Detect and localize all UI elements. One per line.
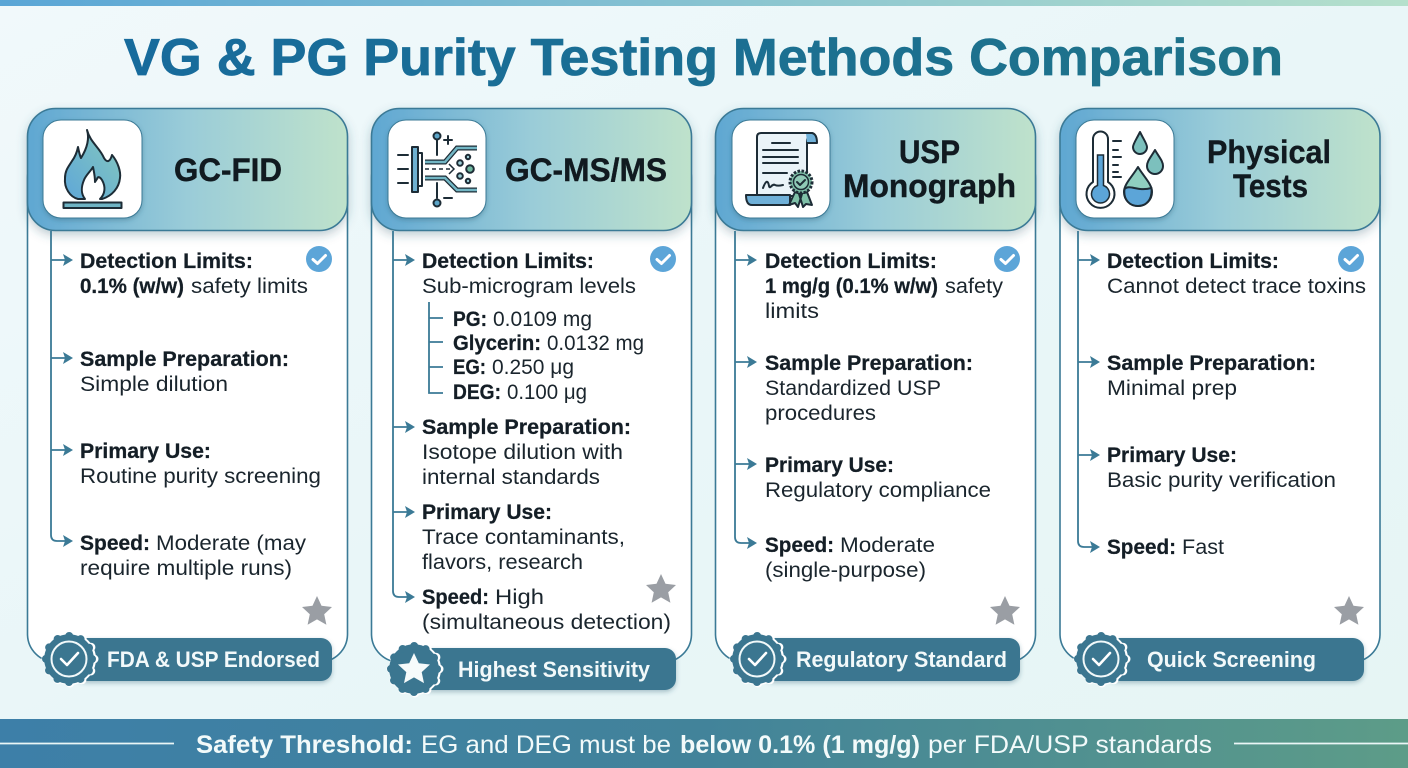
sub-list: detection values: 0.0109 mg xyxy=(493,308,592,331)
sample preparation xyxy=(80,348,289,396)
badge: Quick Screening: Quick Screening xyxy=(1147,647,1316,672)
primary use: Basic purity verification xyxy=(1107,469,1336,492)
primary use: Primary Use: xyxy=(80,440,211,463)
primary use xyxy=(80,440,321,488)
detection limits: Detection Limits: xyxy=(422,250,594,273)
badge: Quick Screening xyxy=(1076,633,1364,685)
card header: USP xyxy=(899,134,960,170)
detection limits xyxy=(765,250,1004,323)
detection limits: limits xyxy=(765,300,819,323)
timeline connector xyxy=(393,231,415,603)
primary use xyxy=(1107,444,1336,492)
sample preparation xyxy=(1107,352,1316,400)
sample preparation xyxy=(765,352,973,425)
speed: Moderate xyxy=(840,534,935,557)
icon: star xyxy=(302,596,332,625)
footer banner: safety threshold: per FDA/USP standards xyxy=(928,731,1212,759)
detection limits: 0.1% (w/w) xyxy=(80,275,184,298)
icon: flame xyxy=(43,120,142,218)
sample preparation: Standardized USP xyxy=(765,377,941,400)
footer banner: safety threshold: EG and DEG must be xyxy=(421,731,671,759)
icon: thermometer and drops xyxy=(1076,120,1174,218)
primary use: Primary Use: xyxy=(765,454,894,477)
speed: (simultaneous detection) xyxy=(422,611,671,634)
sample preparation xyxy=(422,416,631,489)
sub-list: detection values: 0.0132 mg xyxy=(547,332,644,355)
sample preparation: Sample Preparation: xyxy=(1107,352,1316,375)
icon: mass spectrometer xyxy=(388,120,486,218)
sample preparation: Minimal prep xyxy=(1107,377,1237,400)
detection limits: 1 mg/g (0.1% w/w) xyxy=(765,275,938,298)
speed: Speed: xyxy=(765,534,834,557)
card header: Tests xyxy=(1233,168,1308,204)
detection limits: Detection Limits: xyxy=(1107,250,1279,273)
card header: Monograph xyxy=(843,168,1016,204)
icon: certified document xyxy=(732,120,830,218)
icon: check xyxy=(1338,246,1364,272)
timeline connector xyxy=(735,231,757,549)
sample preparation: Simple dilution xyxy=(80,373,228,396)
card header: GC-MS/MS xyxy=(505,152,667,188)
badge: Highest Sensitivity xyxy=(389,643,676,695)
footer banner: safety threshold: Safety Threshold: xyxy=(196,731,413,759)
primary use: Primary Use: xyxy=(1107,444,1237,467)
speed xyxy=(765,534,935,582)
icon: check xyxy=(650,246,676,272)
badge: Highest Sensitivity: Highest Sensitivity xyxy=(458,657,651,682)
primary use xyxy=(765,454,991,502)
badge: FDA & USP Endorsed: FDA & USP Endorsed xyxy=(107,647,320,672)
speed: Fast xyxy=(1182,536,1224,559)
icon: check xyxy=(994,246,1020,272)
sample preparation: procedures xyxy=(765,402,876,425)
card header: GC-FID xyxy=(174,152,282,188)
timeline connector xyxy=(1078,231,1100,553)
top accent bar xyxy=(0,0,1408,6)
icon: star xyxy=(990,596,1020,625)
detection limits xyxy=(80,250,308,298)
card header xyxy=(1060,108,1380,230)
detection limits: Detection Limits: xyxy=(80,250,253,273)
sub-list: detection values: 0.250 μg xyxy=(492,356,574,379)
card body xyxy=(372,150,692,662)
icon: star xyxy=(1334,596,1364,625)
detection limits: Detection Limits: xyxy=(765,250,937,273)
footer banner: safety threshold xyxy=(0,719,1408,768)
primary use: Primary Use: xyxy=(422,501,552,524)
detection limits xyxy=(1107,250,1366,298)
icon: star xyxy=(646,574,676,603)
speed xyxy=(1107,536,1224,559)
sample preparation: Sample Preparation: xyxy=(422,416,631,439)
sample preparation: Sample Preparation: xyxy=(765,352,973,375)
speed xyxy=(80,532,307,580)
card header xyxy=(716,108,1036,230)
card body xyxy=(716,150,1036,662)
footer banner: safety threshold: below 0.1% (1 mg/g) xyxy=(680,731,920,759)
badge: Regulatory Standard: Regulatory Standard xyxy=(796,647,1007,672)
panel: GC-MS/MS xyxy=(372,108,692,695)
badge: Regulatory Standard xyxy=(732,633,1020,685)
detection limits: Sub-microgram levels xyxy=(422,275,636,298)
icon: check xyxy=(306,246,332,272)
detection limits: safety limits xyxy=(191,275,308,298)
sub-list: detection values: PG: xyxy=(453,308,487,331)
card body xyxy=(1060,150,1380,662)
speed xyxy=(422,586,671,634)
sub-list: detection values: DEG: xyxy=(453,381,501,404)
card header: Physical xyxy=(1207,134,1331,170)
detection limits: Cannot detect trace toxins xyxy=(1107,275,1366,298)
primary use: Routine purity screening xyxy=(80,465,321,488)
primary use: flavors, research xyxy=(422,551,583,574)
sample preparation: Isotope dilution with xyxy=(422,441,623,464)
primary use: Regulatory compliance xyxy=(765,479,991,502)
panel: GC-FID xyxy=(28,108,348,685)
panel: USP Monograph xyxy=(716,108,1036,685)
speed: High xyxy=(495,586,544,609)
card header xyxy=(372,108,692,230)
speed: Speed: xyxy=(80,532,150,555)
panel: Physical Tests xyxy=(1060,108,1380,685)
speed: Speed: xyxy=(1107,536,1176,559)
sample preparation: internal standards xyxy=(422,466,600,489)
sample preparation: Sample Preparation: xyxy=(80,348,289,371)
primary use xyxy=(422,501,625,574)
timeline connector xyxy=(51,231,73,547)
primary use: Trace contaminants, xyxy=(422,526,625,549)
speed: (single-purpose) xyxy=(765,559,926,582)
detection limits: safety xyxy=(945,275,1004,298)
speed: Moderate (may xyxy=(156,532,307,555)
speed: Speed: xyxy=(422,586,489,609)
detection limits xyxy=(422,250,636,298)
speed: require multiple runs) xyxy=(80,557,292,580)
sub-list: detection values: Glycerin: xyxy=(453,332,541,355)
title: VG & PG Purity Testing Methods Comparison xyxy=(124,29,1283,87)
sub-list: detection values xyxy=(429,302,644,404)
card body xyxy=(28,150,348,662)
sub-list: detection values: 0.100 μg xyxy=(507,381,587,404)
card header xyxy=(28,108,348,230)
sub-list: detection values: EG: xyxy=(453,356,486,379)
badge: FDA & USP Endorsed xyxy=(44,633,332,685)
